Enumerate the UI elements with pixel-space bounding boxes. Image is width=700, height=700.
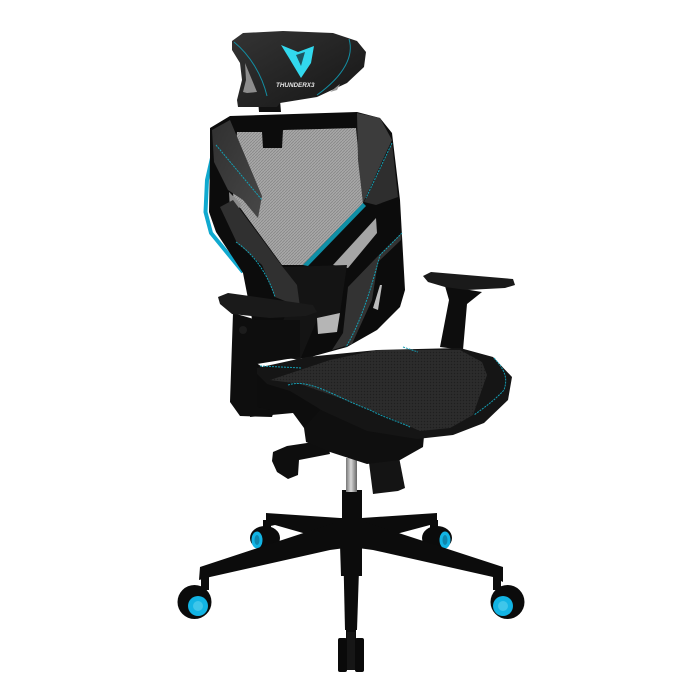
star base: [199, 490, 503, 640]
arm button: [239, 326, 247, 334]
caster: front right: [490, 585, 524, 619]
right outer panel: [364, 143, 398, 205]
lumbar mesh: [270, 265, 347, 360]
mesh panel: [233, 128, 363, 265]
caster: front left: [178, 585, 212, 619]
seat stitching: [260, 347, 506, 427]
left arm pad: [218, 293, 317, 318]
caster: back left: [250, 520, 280, 550]
headrest highlight: [330, 84, 340, 92]
left wing panel: [212, 120, 262, 218]
lower left wing: [220, 200, 300, 307]
left arm post: [230, 313, 300, 417]
backrest shell: [209, 112, 405, 360]
side pocket accent: [206, 158, 243, 272]
lumbar mesh window: [317, 313, 340, 334]
seat rim: [257, 348, 512, 439]
right wing panel: [357, 113, 392, 203]
seat mesh: [270, 350, 487, 431]
headrest neck: [258, 100, 281, 112]
caster: back right: [422, 520, 452, 550]
headrest body: [232, 31, 366, 107]
headrest: [232, 31, 366, 107]
lever: [272, 440, 330, 479]
right edge highlight: [373, 285, 382, 310]
cyan stripe: [303, 203, 366, 266]
small side mesh: [229, 192, 241, 216]
seat bracket: [250, 362, 320, 428]
right arm pad: [423, 272, 515, 290]
right arm post: [440, 286, 482, 350]
backrest: [209, 112, 405, 360]
caster: front centre: [338, 632, 364, 672]
headrest mesh: [243, 63, 257, 93]
stitching: [216, 143, 402, 358]
seat: [257, 347, 512, 439]
headrest stitching: [234, 39, 350, 96]
logo cut: [296, 52, 305, 66]
gas cylinder: [346, 458, 357, 492]
left armrest: [218, 293, 317, 417]
brand name: THUNDERX3: [276, 82, 315, 89]
tilt knob: [368, 452, 405, 494]
seat mechanism: [296, 398, 425, 464]
lower mesh triangle: [333, 218, 377, 268]
lower right wing: [332, 233, 402, 350]
right armrest: [423, 272, 515, 350]
logo: [281, 45, 314, 78]
